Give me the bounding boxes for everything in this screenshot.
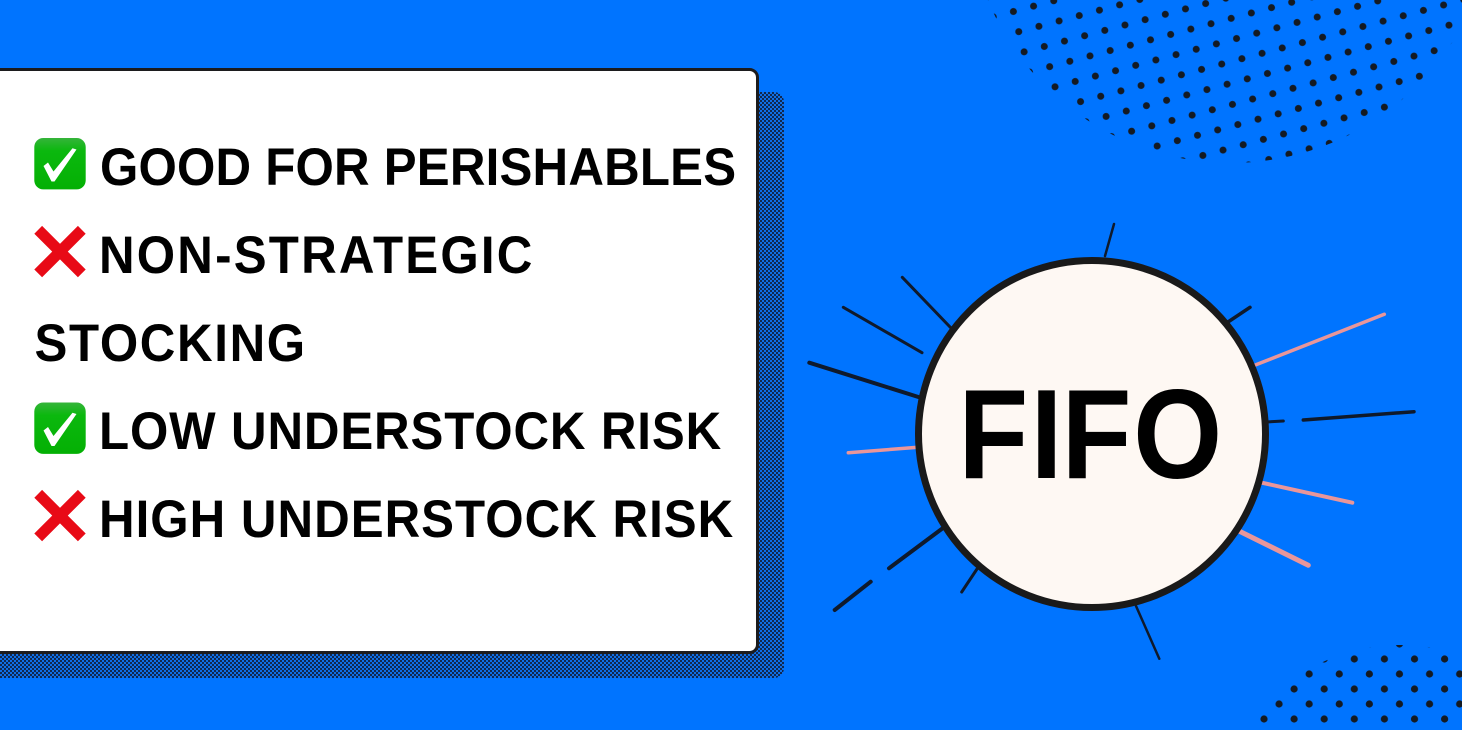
radiating lines: dark <box>809 224 1414 659</box>
FIFO label: FIFO <box>958 363 1222 505</box>
text: non-strategic stocking <box>34 225 532 372</box>
text: high understock risk: HIGH UNDERSTOCK RISK <box>99 489 733 548</box>
panel: comparison card <box>0 70 758 652</box>
halftone dots: bottom right <box>1244 645 1462 730</box>
icon: red cross 2 <box>38 494 82 537</box>
text: non-strategic stocking: NON-STRATEGIC <box>99 225 532 284</box>
halftone dots: top right <box>988 0 1462 163</box>
icon: green check 1 <box>34 138 86 189</box>
radiating lines: pink <box>848 314 1384 565</box>
card shadow <box>0 92 784 678</box>
text: good for perishables: GOOD FOR PERISHABLES <box>100 137 736 196</box>
card background <box>0 70 758 652</box>
text: non-strategic stocking: STOCKING <box>34 313 305 372</box>
icon: red cross 1 <box>38 230 82 273</box>
icon: green check 2 <box>34 402 86 454</box>
badge: FIFO circle <box>918 260 1266 608</box>
text: low understock risk: LOW UNDERSTOCK RISK <box>99 401 721 460</box>
